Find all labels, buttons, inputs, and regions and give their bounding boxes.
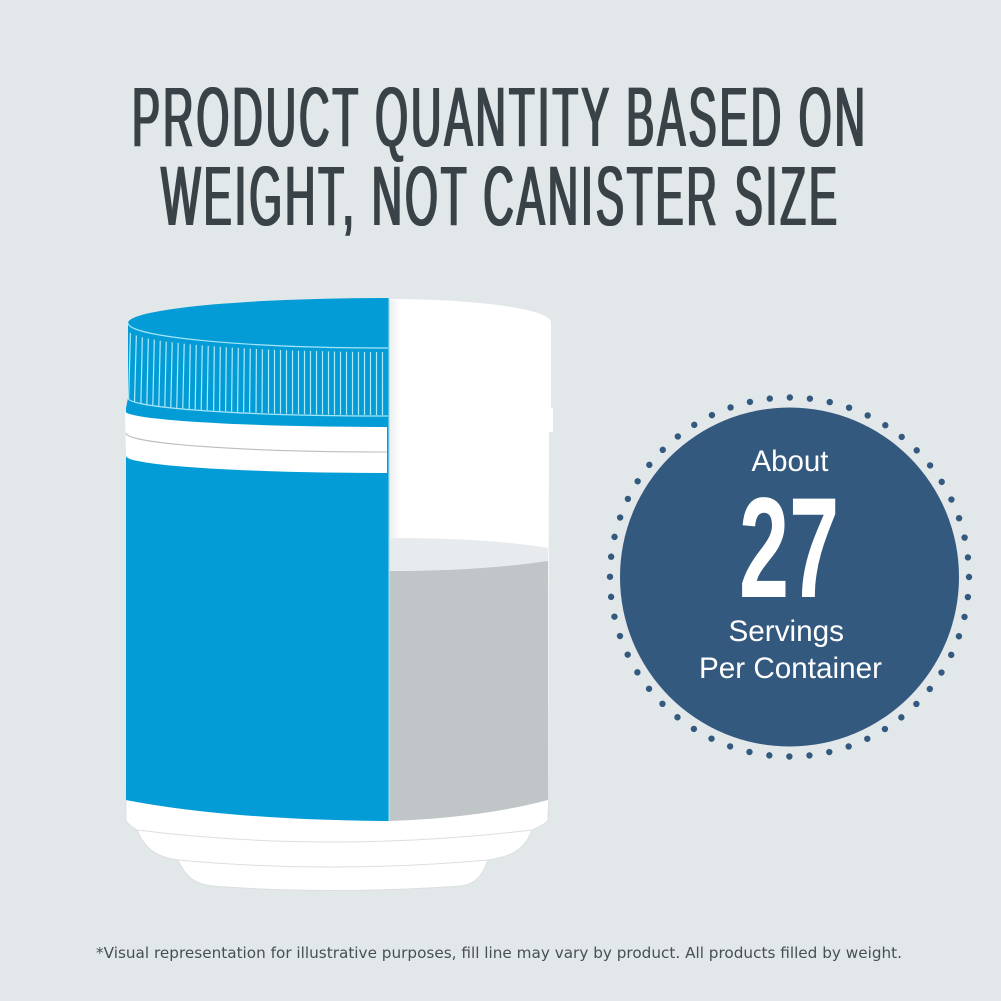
liquid surface [389,538,548,571]
canister right half: white cutaway [389,299,553,810]
badge text: Servings [728,615,844,648]
badge: servings per container [610,398,969,756]
illustration: canister [125,298,553,890]
badge circle [620,408,959,746]
powder fill level [389,561,548,821]
dotted ring [610,398,969,756]
badge text: Per Container [699,652,882,685]
badge text: 27 [739,469,839,628]
title [132,71,865,244]
centre seam [388,299,390,821]
lid edge lines [128,323,388,416]
white neck band [125,411,387,473]
lid ribs [128,330,382,420]
footnote: *Visual representation for illustrative purposes, fill line may vary by product. All products filled by weight. [96,944,902,962]
title: WEIGHT, NOT CANISTER SIZE [161,150,837,244]
neck band line [126,433,387,452]
canister left half: blue label and lid [126,298,388,821]
canister base tiers [126,790,548,890]
badge text [699,445,882,685]
badge text: About [752,445,829,478]
title: PRODUCT QUANTITY BASED ON [132,71,865,165]
